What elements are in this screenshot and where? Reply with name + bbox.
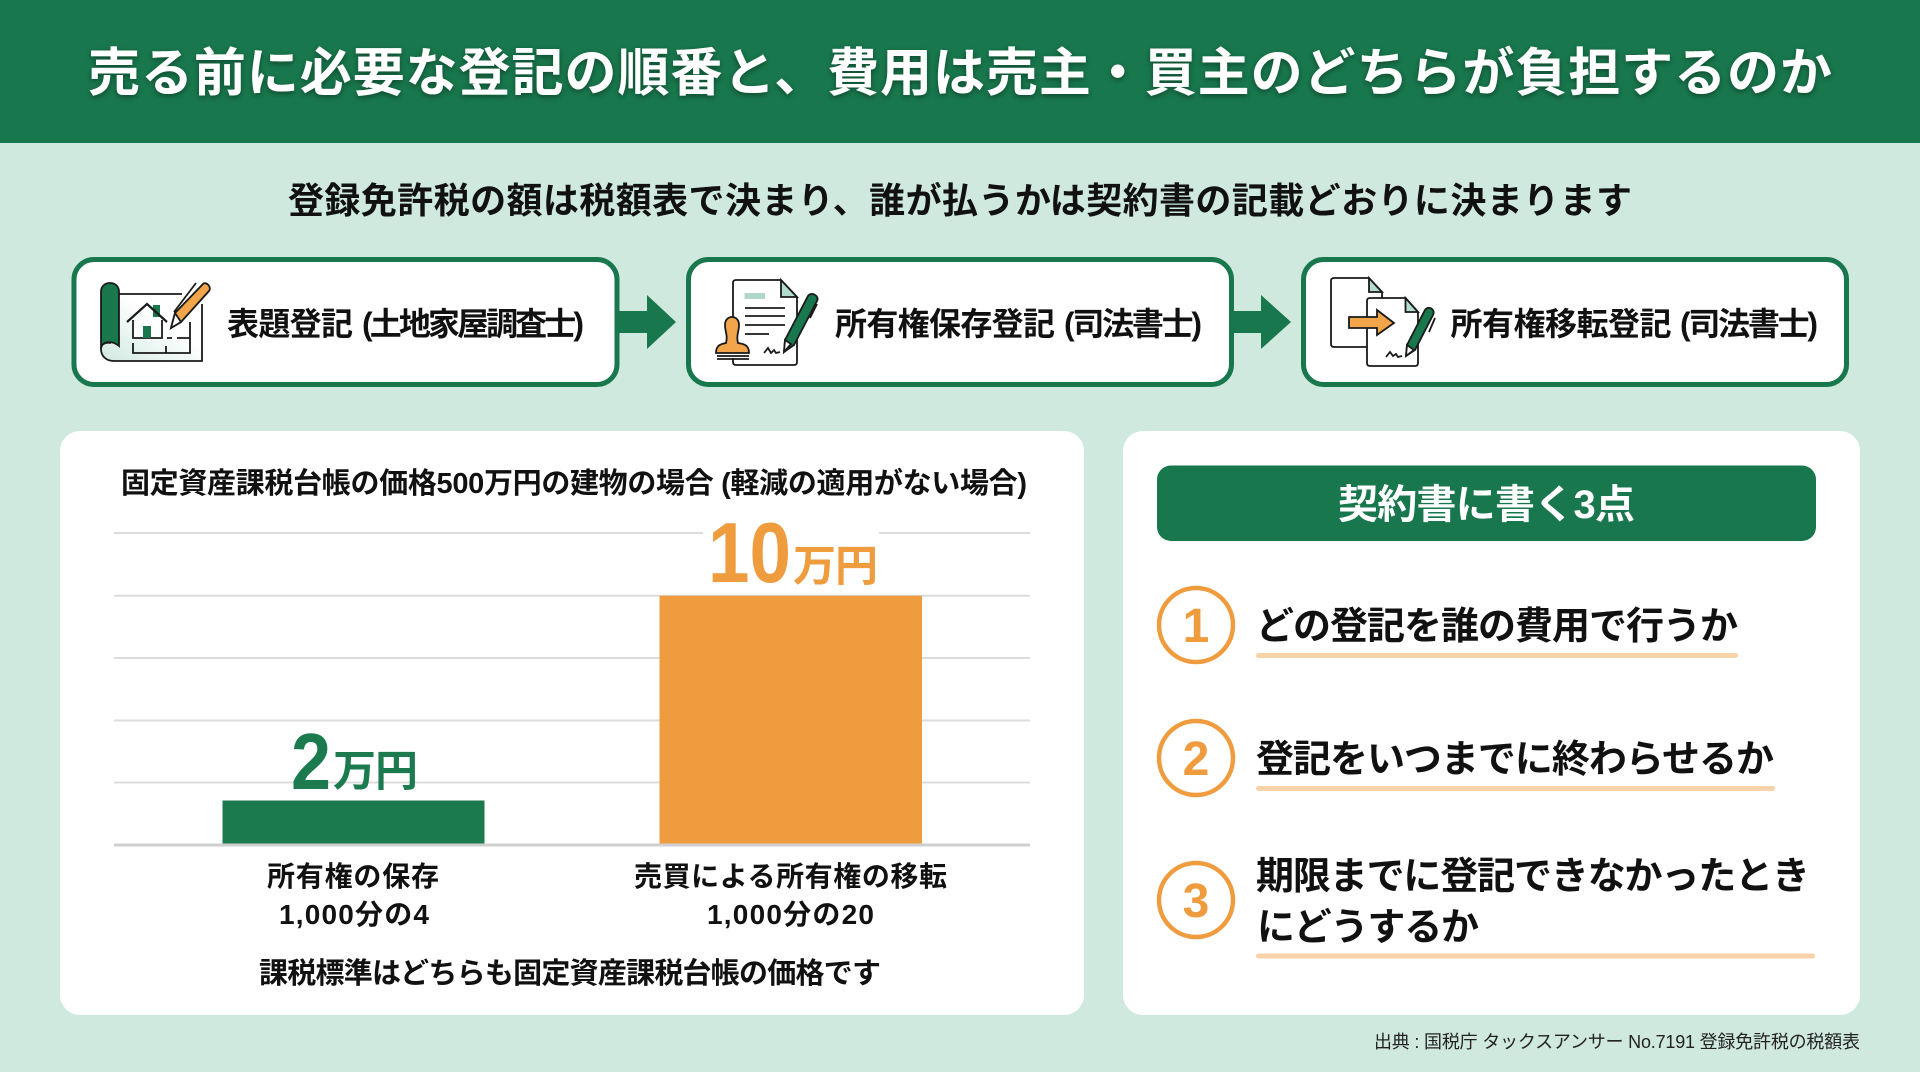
value label: 2万円: 万円	[333, 748, 418, 796]
step 1 label: (土地家屋調査士)	[362, 306, 584, 342]
bar chart	[114, 506, 1030, 930]
value label: 10万円: 10	[708, 506, 791, 601]
step 1: title registration	[74, 260, 617, 384]
chart title: 固定資産課税台帳の価格500万円の建物の場合 (軽減の適用がない場合)	[121, 466, 1027, 500]
icon: blueprint with house and pencil	[101, 283, 210, 361]
panel: tax bar chart	[60, 431, 1084, 1015]
step 2 label: (司法書士)	[1064, 306, 1202, 342]
value label: 2万円	[291, 717, 418, 806]
value label: 10万円	[708, 506, 878, 601]
icon: two documents with arrow and pen	[1331, 278, 1435, 366]
step 1 label: 表題登記	[227, 306, 353, 342]
panel: three points for the contract	[1123, 431, 1860, 1015]
arrow 2	[1234, 295, 1291, 349]
category label: preservation: 所有権の保存	[267, 861, 439, 892]
category label: transfer: 売買による所有権の移転	[634, 861, 947, 892]
category label: preservation: 1,000分の4	[279, 899, 429, 930]
subtitle: 登録免許税の額は税額表で決まり、誰が払うかは契約書の記載どおりに決まります	[288, 180, 1632, 221]
point 1: どの登記を誰の費用で行うか	[1256, 606, 1738, 648]
value label: 10万円: 万円	[793, 543, 878, 591]
category label: transfer	[634, 861, 947, 930]
point 1: 1	[1183, 600, 1209, 653]
category label: preservation	[267, 861, 439, 930]
point 3: 期限までに登記できなかったとき	[1256, 856, 1810, 898]
panel heading: 契約書に書く3点	[1338, 483, 1635, 527]
point 3	[1159, 856, 1815, 958]
step 2 label	[835, 306, 1202, 342]
point 1	[1159, 588, 1738, 662]
arrow 1	[619, 295, 676, 349]
point 3: にどうするか	[1257, 907, 1479, 949]
step 3: ownership transfer registration	[1304, 260, 1846, 384]
chart note: 課税標準はどちらも固定資産課税台帳の価格です	[259, 957, 881, 990]
value label: 2万円: 2	[291, 717, 331, 806]
source credit: 出典 : 国税庁 タックスアンサー No.7191 登録免許税の税額表	[1374, 1032, 1860, 1052]
header band with title	[0, 0, 1920, 143]
panel heading	[1157, 466, 1816, 541]
point 3: 3	[1183, 875, 1209, 928]
step 3 label	[1450, 306, 1818, 342]
step 2: ownership preservation registration	[688, 260, 1232, 384]
point 2: 登記をいつまでに終わらせるか	[1256, 739, 1774, 781]
point 2	[1159, 721, 1775, 795]
category label: transfer: 1,000分の20	[707, 899, 874, 930]
point 2: 2	[1183, 733, 1209, 786]
header band with title: 売る前に必要な登記の順番と、費用は売主・買主のどちらが負担するのか	[88, 45, 1832, 103]
icon: document with stamp and pen	[716, 280, 818, 365]
step 2 label: 所有権保存登記	[835, 306, 1055, 342]
step 3 label: 所有権移転登記	[1450, 306, 1672, 342]
step 3 label: (司法書士)	[1680, 306, 1818, 342]
step 1 label	[227, 306, 584, 342]
